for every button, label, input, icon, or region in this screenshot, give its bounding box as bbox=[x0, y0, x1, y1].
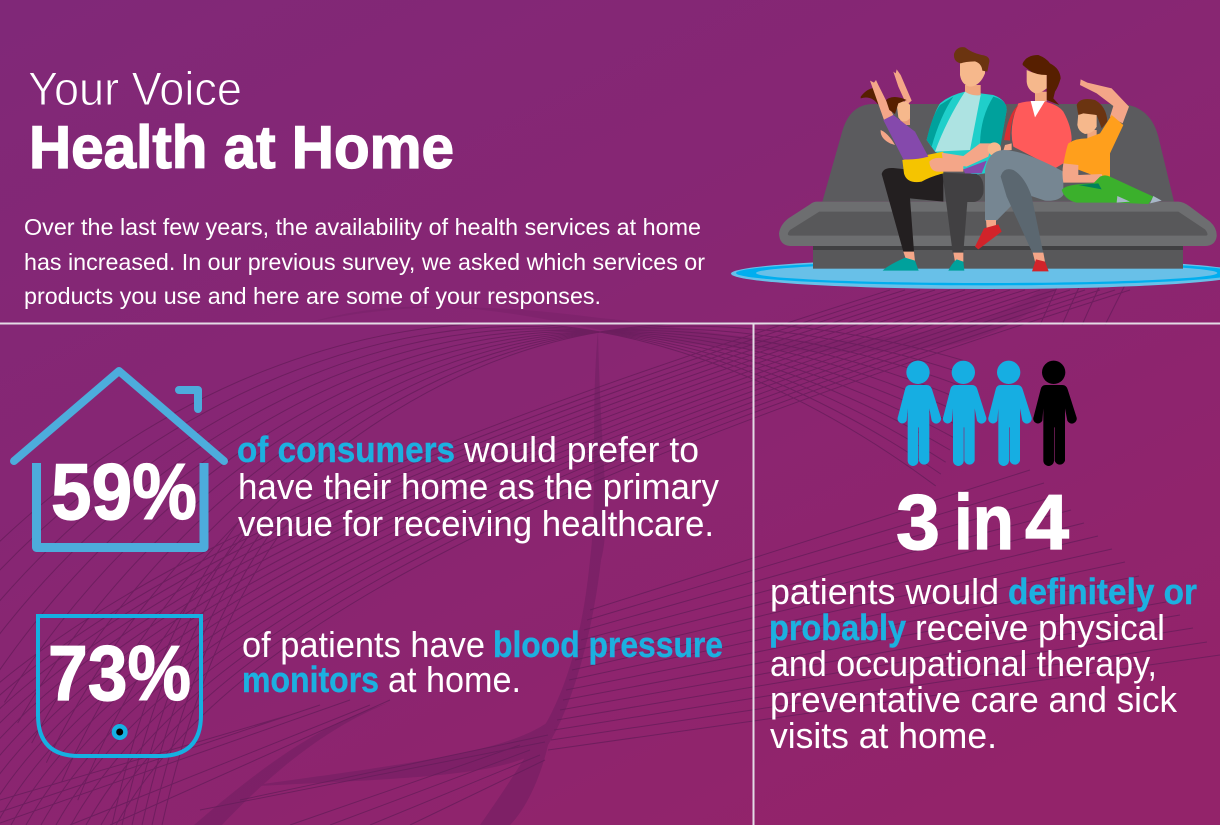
intro text: Over the last few years, the availability of health services at home bbox=[24, 214, 701, 240]
stat heading: 3 in 4: in bbox=[954, 478, 1014, 566]
title bbox=[28, 62, 454, 181]
intro text: products you use and here are some of your responses. bbox=[24, 283, 601, 309]
stat text: therapy at home: patients would bbox=[770, 571, 999, 612]
icon: house with 59%: 59% bbox=[51, 447, 197, 536]
intro text: has increased. In our previous survey, we asked which services or bbox=[24, 249, 705, 275]
intro text bbox=[24, 214, 705, 309]
icon: house with 59% bbox=[14, 371, 224, 548]
stat text: 59% of consumers bbox=[237, 429, 719, 544]
rug bbox=[731, 258, 1220, 289]
stat text: 59% of consumers: would prefer to bbox=[463, 429, 699, 470]
stat text: therapy at home: visits at home. bbox=[770, 715, 997, 756]
stat text: 59% of consumers: have their home as the primary bbox=[238, 466, 719, 507]
icon: blood pressure monitor with 73%: 73% bbox=[48, 629, 191, 717]
title: Your Voice bbox=[28, 62, 242, 115]
title: Health at Home bbox=[29, 114, 454, 181]
illustration: family on sofa bbox=[730, 47, 1220, 289]
stat text: therapy at home: receive physical bbox=[915, 607, 1165, 648]
stat text: therapy at home: and occupational therapy, bbox=[770, 643, 1157, 684]
man bbox=[882, 47, 1007, 271]
stat text: therapy at home: definitely or bbox=[1008, 571, 1197, 612]
stat text: 73% blood pressure monitors: of patients have bbox=[242, 624, 485, 665]
stat text: 73% blood pressure monitors: monitors bbox=[242, 659, 379, 700]
background mesh pattern bbox=[0, 286, 1220, 825]
stat heading: 3 in 4: 3 bbox=[896, 478, 940, 566]
stat text: therapy at home: preventative care and sick bbox=[770, 679, 1178, 720]
stat text: therapy at home bbox=[769, 571, 1197, 756]
icon: blood pressure monitor with 73% bbox=[38, 616, 201, 756]
stat heading: 3 in 4 bbox=[896, 478, 1069, 566]
boy bbox=[1062, 79, 1162, 204]
stat heading: 3 in 4: 4 bbox=[1025, 478, 1069, 566]
icon: four people, three highlighted bbox=[898, 361, 1077, 466]
stat text: 73% blood pressure monitors: at home. bbox=[388, 659, 521, 700]
girl bbox=[861, 69, 1001, 182]
stat text: 59% of consumers: venue for receiving healthcare. bbox=[238, 503, 714, 544]
stat text: 73% blood pressure monitors bbox=[242, 624, 723, 700]
woman bbox=[975, 55, 1072, 271]
stat text: therapy at home: probably bbox=[769, 607, 906, 648]
sofa bbox=[779, 104, 1217, 269]
stat text: 59% of consumers: of consumers bbox=[237, 429, 455, 470]
divider lines bbox=[0, 324, 1220, 825]
stat text: 73% blood pressure monitors: blood pressure bbox=[493, 624, 723, 665]
